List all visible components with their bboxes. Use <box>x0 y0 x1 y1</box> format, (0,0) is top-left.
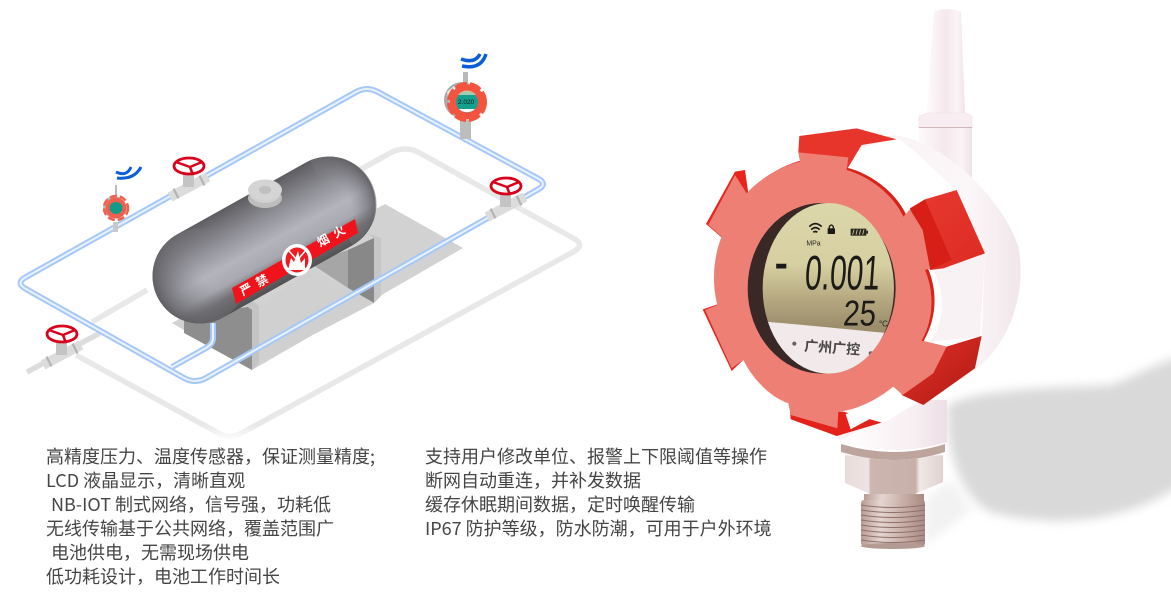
icon: lock <box>828 225 835 234</box>
feature list: left column: 电池供电，无需现场供电 <box>51 539 249 565</box>
feature list: right column: 断网自动重连，并补发数据 <box>425 467 641 493</box>
temperature reading: 25 <box>842 292 878 333</box>
warning band <box>232 218 358 304</box>
red tooth: lower left <box>703 304 743 371</box>
antenna <box>919 9 972 190</box>
icon: wifi <box>809 224 822 232</box>
feature list: left column: 低功耗设计，电池工作时间长 <box>46 563 280 589</box>
tank flange <box>248 180 282 208</box>
pressure transmitter device <box>703 9 1021 549</box>
red tooth: upper left <box>706 170 748 237</box>
dark window rim <box>748 203 896 374</box>
red tooth: top <box>798 128 897 170</box>
label plate <box>768 322 884 374</box>
warning band: 烟火 <box>314 218 353 250</box>
storage tank platform <box>172 204 463 370</box>
valve pipe inlet <box>27 333 100 372</box>
small sensor with signal icon <box>103 167 141 232</box>
red tooth: bottom <box>789 403 882 436</box>
pressure reading: 0.001 <box>803 246 882 300</box>
feature list: right column: 支持用户修改单位、报警上下限阈值等操作 <box>425 443 767 469</box>
icon: wifi signal <box>461 54 486 67</box>
neck <box>842 400 947 450</box>
valve: right <box>487 178 525 217</box>
feature list: right column <box>425 443 772 541</box>
housing body <box>767 135 1021 440</box>
unit: MPa: MPa <box>806 240 821 247</box>
blue pipe loop <box>20 89 543 381</box>
red tooth: right <box>910 190 985 270</box>
icon: wifi signal <box>116 167 141 178</box>
red tooth: lower right <box>902 336 982 405</box>
drop shadow of device <box>925 355 1171 545</box>
unit: celsius: °C <box>879 320 888 329</box>
storage tank <box>152 156 376 324</box>
valve: lower left <box>43 326 81 365</box>
white bezel band <box>723 138 985 432</box>
label plate: 广州广控 <box>804 336 861 360</box>
pressure fitting <box>841 444 945 549</box>
minus sign: - <box>775 242 788 286</box>
floor pipe loop <box>76 149 580 441</box>
feature list: left column: LCD 液晶显示，清晰直观 <box>46 467 245 493</box>
large sensor with signal icon <box>444 54 486 139</box>
valve: upper left <box>170 158 208 197</box>
feature list: left column <box>46 443 375 589</box>
tank branch pipe <box>172 323 213 367</box>
feature list: left column: 高精度压力、温度传感器，保证测量精度; <box>46 443 375 469</box>
warning band: 严禁 <box>237 267 276 299</box>
feature list: right column: 缓存休眠期间数据，定时唤醒传输 <box>425 491 695 517</box>
housing and head, zoom coordinates <box>703 128 1021 440</box>
white strip by bottom tooth <box>846 394 904 429</box>
icon: battery <box>851 229 868 236</box>
feature list: right column: IP67 防护等级，防水防潮，可用于户外环境 <box>425 515 772 541</box>
feature list: left column: 无线传输基于公共网络，覆盖范围广 <box>46 515 334 541</box>
large sensor with signal icon: 2.020 <box>458 99 475 106</box>
ring side wall <box>750 160 935 393</box>
LCD screen <box>762 203 894 374</box>
feature list: left column: NB-IOT 制式网络，信号强，功耗低 <box>51 491 331 517</box>
salmon face ring <box>705 152 947 428</box>
